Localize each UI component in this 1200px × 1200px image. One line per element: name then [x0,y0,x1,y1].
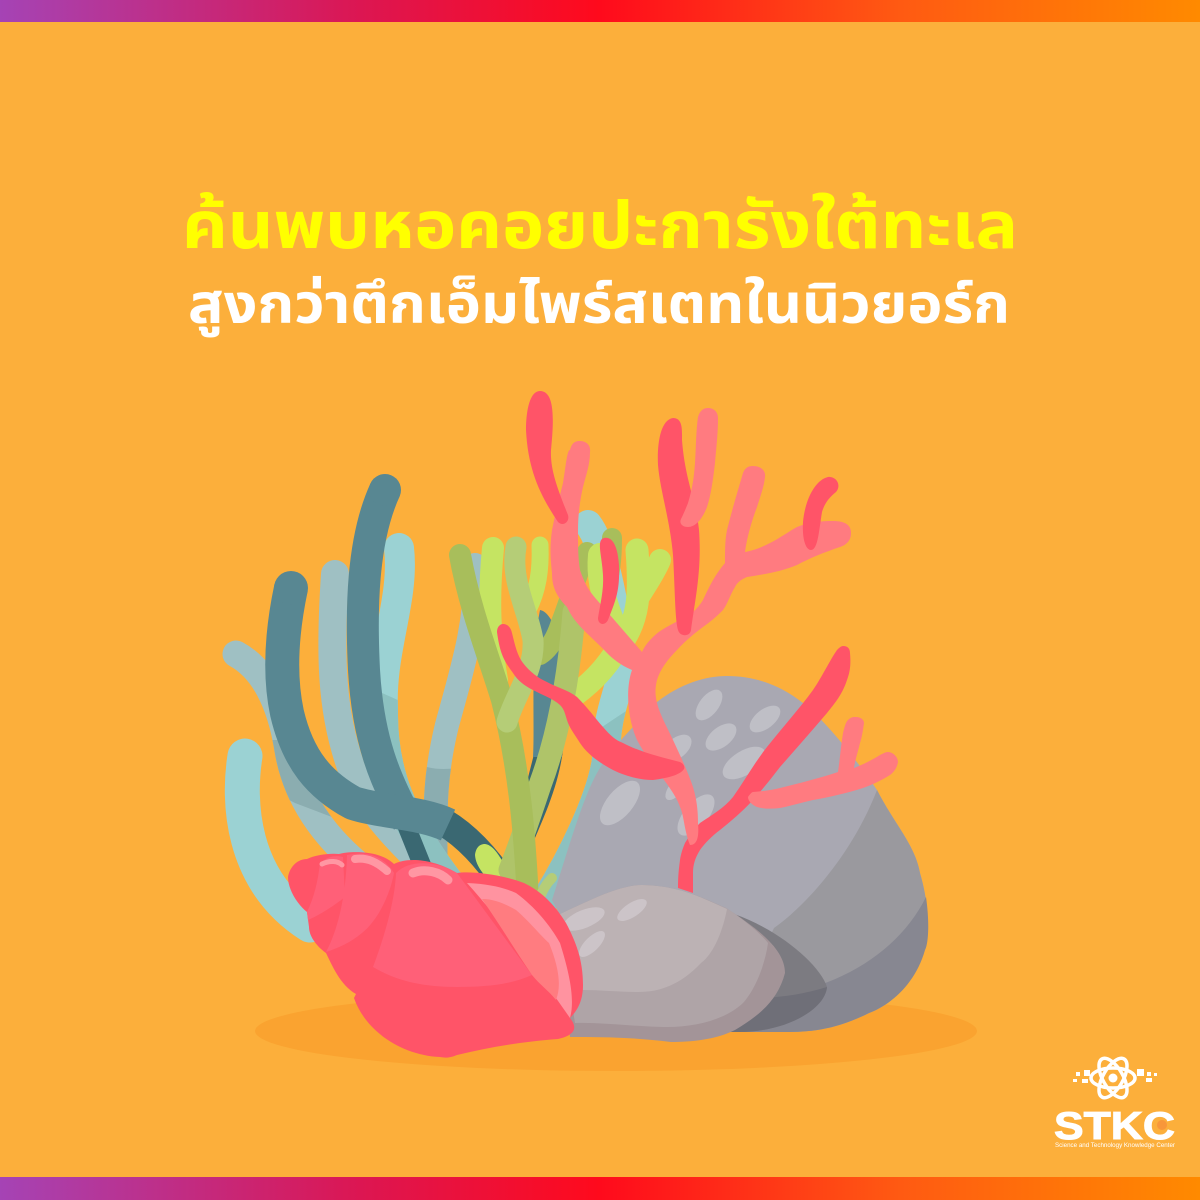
logo orange dot [1157,1120,1167,1130]
shell lip [467,883,572,1018]
rock shade lower [740,897,928,1032]
shell body highlight [373,863,532,987]
shell whorl 2 [326,854,394,952]
lime leaf at base [475,844,516,900]
olive fronds back [540,538,612,655]
rock: small shadow lower [720,987,827,1032]
rock spots [593,685,785,842]
rock shade right [740,790,928,1032]
coral: light lower right branch [748,717,898,809]
shell lip inner [482,899,559,1000]
coral: light upper strand [680,408,718,527]
shell [288,852,583,1058]
red strand top left [526,391,568,524]
coral: red right branch [678,646,850,893]
illustration: coral reef, rocks and shell [236,391,977,1071]
olive main stem [460,555,528,900]
logo: STKC [1054,1054,1175,1149]
title [182,188,1018,338]
red S-curve [497,624,684,780]
coral: main light pink body [550,441,851,845]
logo tagline: Science and Technology Knowledge Center [1055,1143,1175,1149]
olive stem secondary [510,612,574,870]
red strand small inner [598,538,619,624]
rock: small shadow [700,914,827,1032]
lime frond right [565,550,660,702]
back seaweed: blue-grey [236,565,475,900]
logo wordmark: STKC [1054,1105,1175,1148]
top gradient bar [0,0,1200,22]
coral: red strands [497,391,838,780]
pale olive frond [507,547,533,722]
lime fronds back [490,545,540,680]
title line 2: สูงกว่าตึกเอ็มไพร์สเตทในนิวยอร์ก [188,273,1010,338]
rock: large grey [552,676,928,1032]
red strand centre [658,418,700,635]
rock: small pebble [558,885,785,1042]
shell whorl 1 [307,856,345,920]
dark teal seaweed right, upper [533,610,563,757]
pebble spots [560,895,650,961]
logo atom mark [1073,1054,1157,1102]
back seaweed: muted teal shaded parts [382,693,626,908]
back seaweed: light teal [242,524,622,925]
ground shadow [255,991,977,1071]
title line 1: ค้นพบหอคอยปะการังใต้ทะเล [182,188,1018,262]
back seaweed: darker blue-grey lower parts [272,740,451,854]
pale olive leaf at shell edge [538,878,552,905]
dark shaded seaweed stems [402,815,498,890]
shell highlights [322,859,448,880]
red strand right small [803,477,838,550]
dark teal seaweed right, lower [503,750,563,885]
dark teal seaweed [282,490,448,825]
olive and lime seaweed [460,538,660,905]
bottom gradient bar [0,1177,1200,1200]
